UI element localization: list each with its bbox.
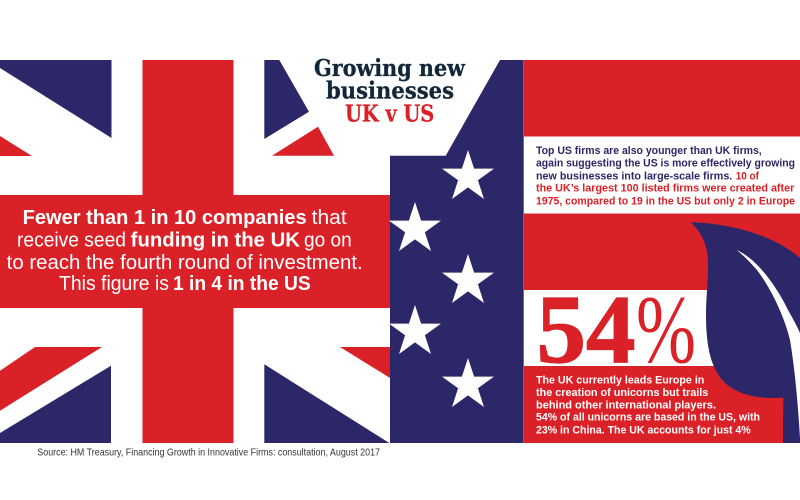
text block: younger firms: again suggesting the US is more effectively growing: [536, 158, 795, 170]
text block: unicorns: behind other international players.: [536, 399, 716, 411]
text block: younger firms: new businesses into large-scale firms.: [536, 170, 732, 182]
big number: 54%: 54: [536, 276, 636, 384]
title: businesses: [326, 77, 454, 104]
title: Growing new: [314, 55, 466, 82]
title: [314, 55, 466, 128]
text block: unicorns: The UK currently leads Europe in: [536, 374, 704, 386]
panel: us stripes: [524, 60, 800, 443]
text block: younger firms: Top US firms are also younger than UK firms,: [536, 145, 762, 157]
text block: younger firms: 1975, compared to 19 in the US but only 2 in Europe: [536, 195, 795, 207]
text block: seed funding statistic: receive seed: [17, 230, 126, 252]
big number: 54%: [536, 276, 696, 384]
text block: seed funding statistic: that: [312, 207, 347, 229]
text block: unicorns: 23% in China. The UK accounts for just 4%: [536, 424, 751, 436]
big number: 54%: %: [636, 276, 696, 384]
source note: Source: HM Treasury, Financing Growth in Innovative Firms: consultation, August 2017: [37, 447, 380, 459]
text block: seed funding statistic: funding in the UK: [131, 230, 301, 252]
text block: younger firms: [536, 145, 795, 207]
text block: unicorns: [536, 374, 760, 436]
text block: seed funding statistic: go on: [304, 230, 352, 252]
panel: union jack flag: [0, 60, 390, 443]
text block: seed funding statistic: to reach the fourth round of investment.: [7, 252, 363, 274]
text block: seed funding statistic: 1 in 4 in the US: [173, 273, 311, 295]
text block: younger firms: the UK’s largest 100 listed firms were created after: [536, 183, 794, 195]
text block: seed funding statistic: Fewer than 1 in 10 companies: [23, 207, 307, 229]
panel: us canton with stars: [389, 60, 524, 443]
text block: unicorns: the creation of unicorns but trails: [536, 387, 708, 399]
text block: seed funding statistic: [7, 207, 363, 295]
title: UK v US: [345, 101, 434, 128]
text block: younger firms: 10 of: [736, 170, 759, 182]
text block: seed funding statistic: This figure is: [59, 273, 169, 295]
text block: unicorns: 54% of all unicorns are based in the US, with: [536, 412, 760, 424]
icon: leaf: [691, 222, 800, 443]
